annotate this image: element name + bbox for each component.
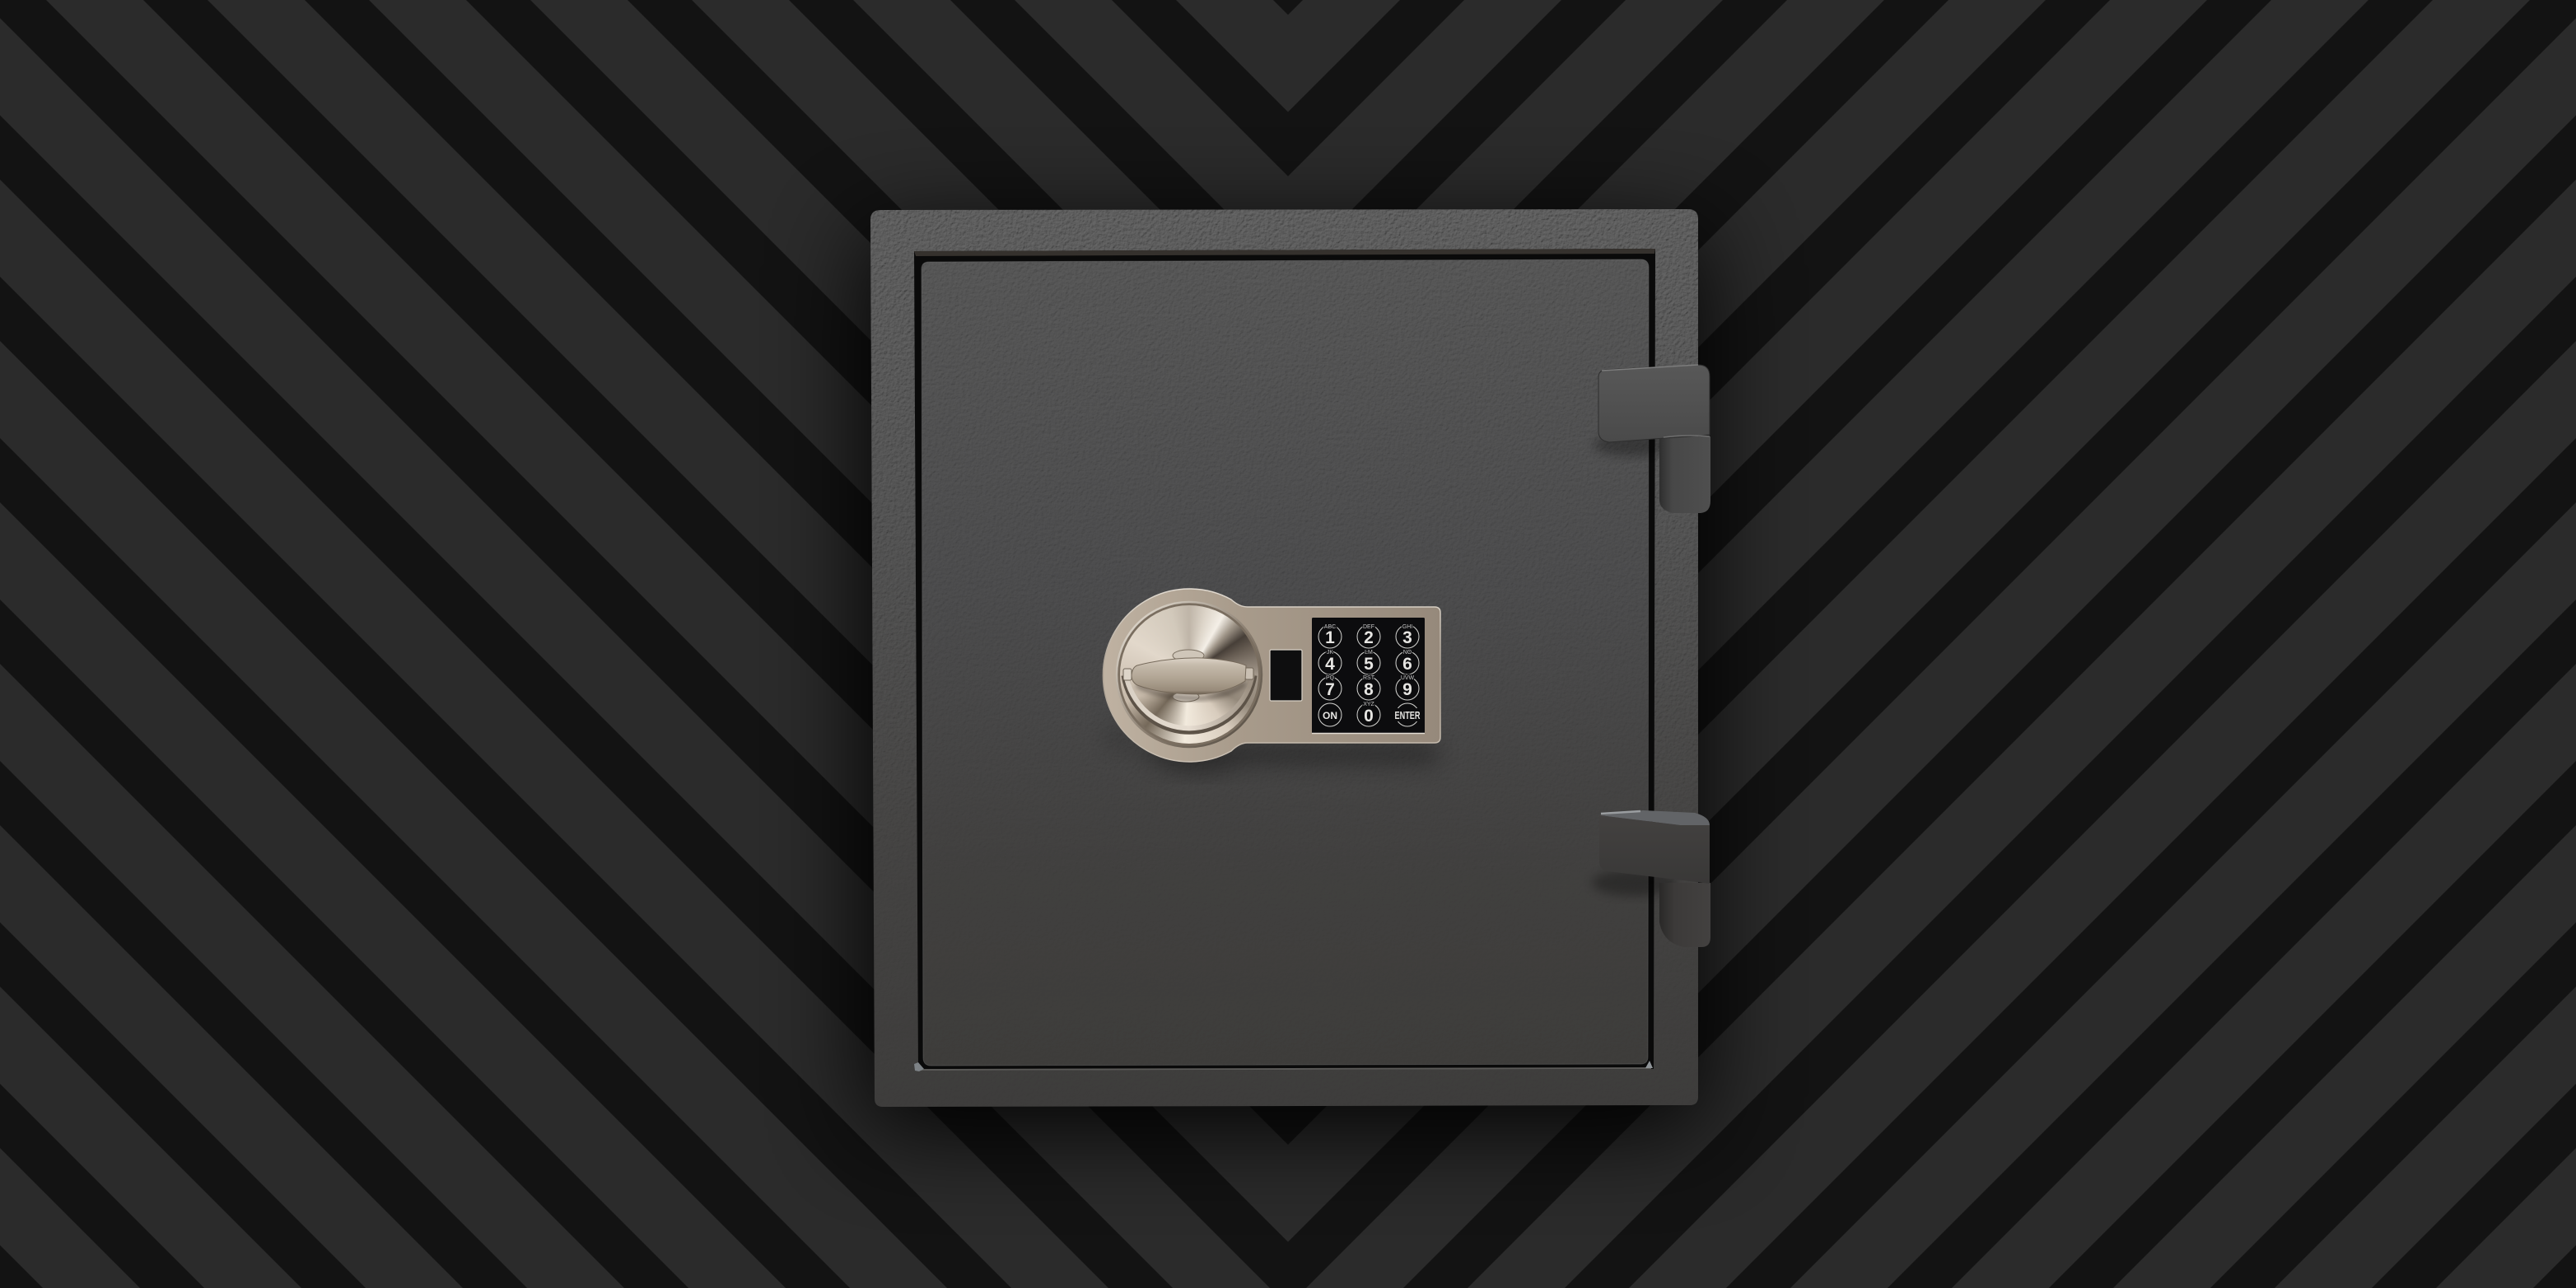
door surface texture — [922, 259, 1649, 507]
key legends: 9 — [1402, 680, 1412, 699]
electronic lock — [1103, 589, 1440, 771]
key legends: 2 — [1364, 628, 1374, 647]
key legends: ABC — [1324, 624, 1336, 630]
key legends: ENTER — [1395, 709, 1421, 721]
key legends: RST — [1363, 675, 1375, 681]
key legends: PQ — [1326, 675, 1335, 681]
brushed metal dish — [1120, 605, 1258, 744]
key legends: GHI — [1402, 624, 1412, 630]
sensor window — [1270, 650, 1302, 701]
door recess — [914, 249, 1655, 1071]
upper hinge — [1594, 365, 1710, 513]
key legends: 5 — [1364, 655, 1374, 674]
key legends: NO — [1403, 650, 1412, 656]
key legends: 4 — [1325, 655, 1335, 674]
lock plate — [1103, 589, 1440, 762]
safe — [865, 206, 1721, 1112]
key legends: LM — [1365, 650, 1373, 656]
handle shadow — [1136, 684, 1245, 698]
keypad panel — [1312, 618, 1425, 734]
safe outer frame — [870, 209, 1698, 1107]
key legends: JK — [1327, 650, 1333, 656]
dish rim — [1117, 602, 1262, 747]
lock shadow — [1112, 725, 1437, 771]
key legends: XYZ — [1363, 702, 1375, 707]
key legends — [1323, 624, 1422, 726]
safe drop shadow — [865, 232, 1704, 1130]
ring lug left — [1123, 669, 1132, 680]
key legends: DEF — [1363, 624, 1374, 630]
key circles — [1318, 625, 1419, 726]
lower hinge — [1592, 810, 1710, 947]
frame surface texture — [870, 209, 1698, 727]
ring lug right — [1245, 668, 1253, 679]
handle pivot top — [1173, 650, 1204, 661]
door panel — [922, 259, 1649, 1066]
key legends: 7 — [1325, 680, 1335, 699]
key legends: 6 — [1402, 655, 1412, 674]
handle grip — [1132, 658, 1246, 694]
key legends: ON — [1323, 710, 1337, 721]
bail ring — [1125, 674, 1253, 730]
key legends: 8 — [1364, 680, 1374, 699]
key legends: UVW — [1401, 675, 1415, 681]
key legends: 0 — [1364, 707, 1374, 726]
key legends: 1 — [1325, 628, 1335, 647]
handle pivot bottom — [1173, 692, 1199, 702]
key legends: 3 — [1402, 628, 1412, 647]
